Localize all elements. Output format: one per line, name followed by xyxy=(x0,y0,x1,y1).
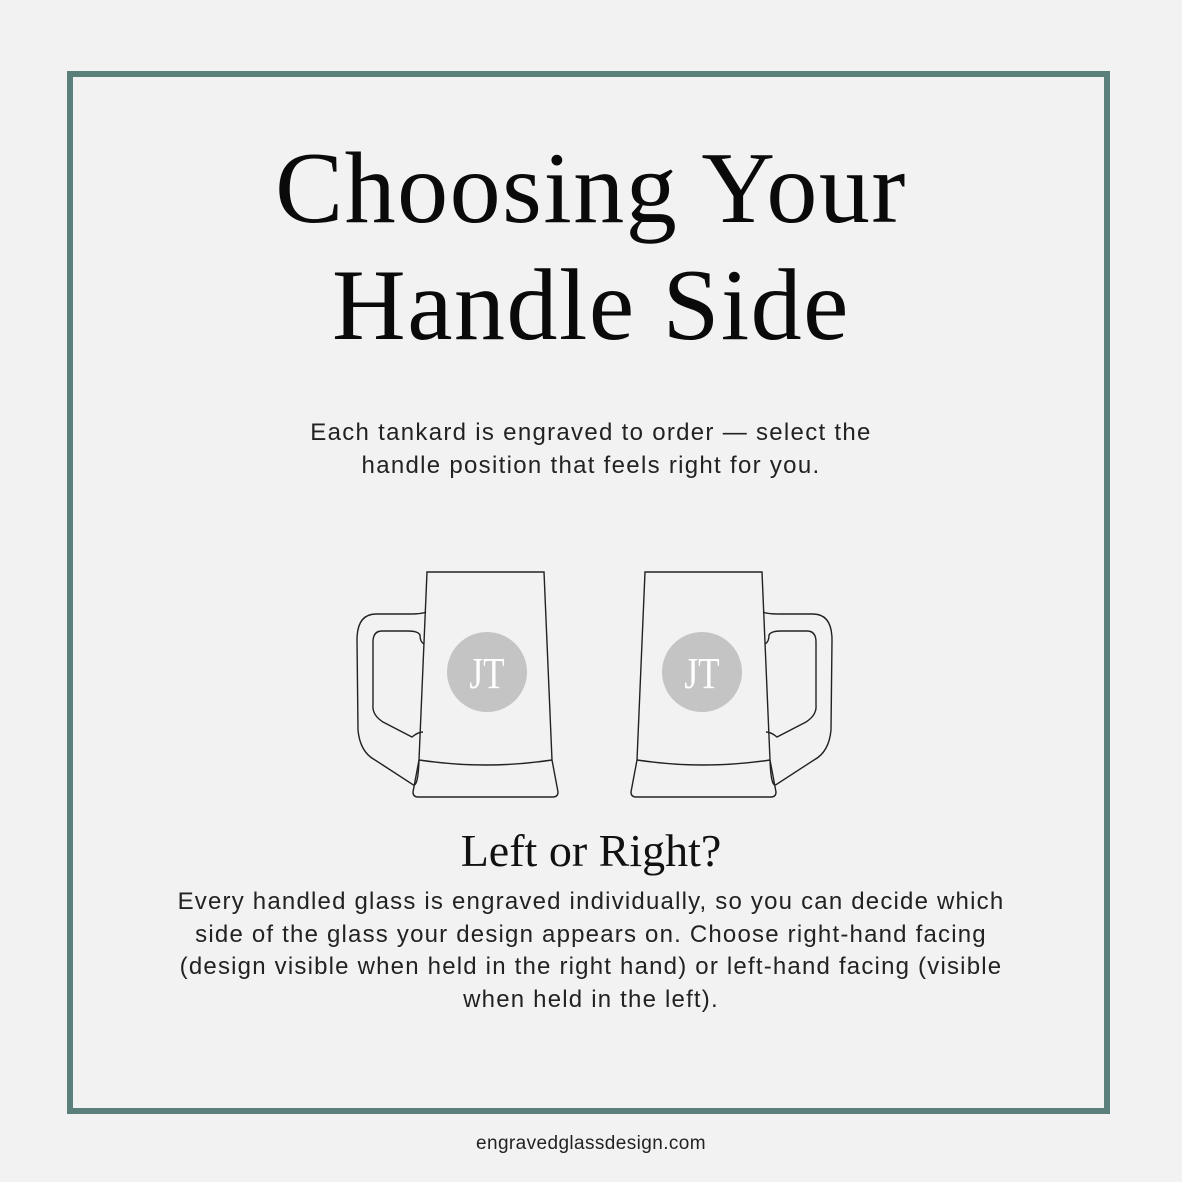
body text xyxy=(178,888,1004,1013)
frame border xyxy=(67,71,1110,1114)
title: Handle Side xyxy=(332,249,850,362)
subtitle xyxy=(310,419,872,479)
body text: when held in the left). xyxy=(463,986,719,1013)
monogram right xyxy=(662,632,742,712)
title xyxy=(275,132,907,362)
title: Choosing Your xyxy=(275,132,907,245)
heading: Left or Right?: Left or Right? xyxy=(461,825,721,876)
body text: (design visible when held in the right hand) or left-hand facing (visible xyxy=(180,953,1002,980)
monogram left: JT xyxy=(469,648,505,698)
body text: side of the glass your design appears on. Choose right-hand facing xyxy=(195,921,987,948)
right tankard xyxy=(631,572,832,797)
left tankard xyxy=(357,572,558,797)
body text: Every handled glass is engraved individually, so you can decide which xyxy=(178,888,1004,915)
monogram left xyxy=(447,632,527,712)
subtitle: Each tankard is engraved to order — select the xyxy=(310,419,872,446)
monogram right: JT xyxy=(684,648,720,698)
subtitle: handle position that feels right for you. xyxy=(362,452,820,479)
footer url: engravedglassdesign.com xyxy=(476,1133,706,1154)
